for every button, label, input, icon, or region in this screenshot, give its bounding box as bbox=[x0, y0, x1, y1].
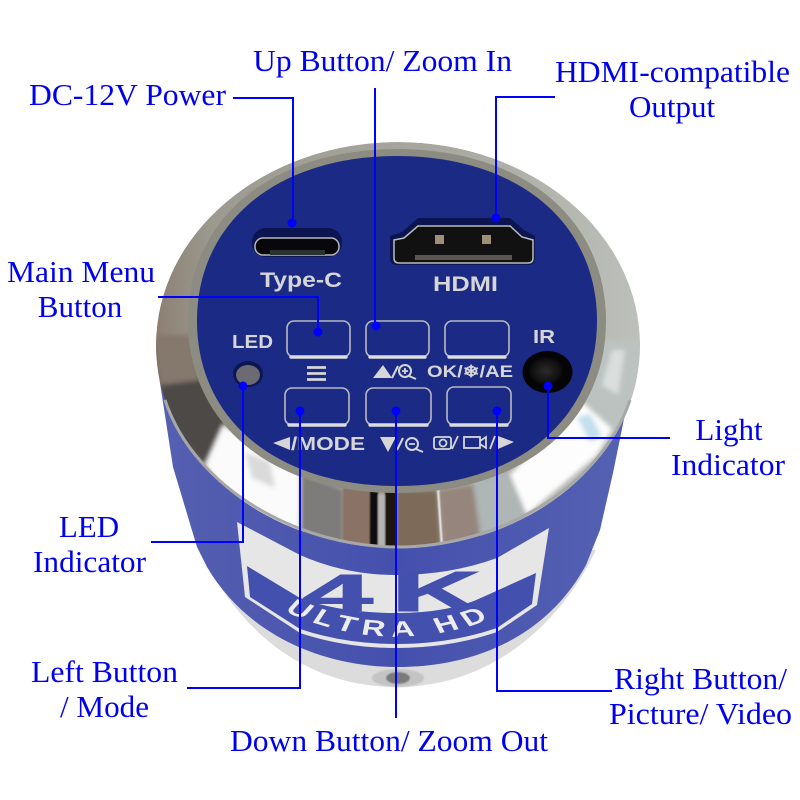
HDMI label: HDMI bbox=[433, 273, 498, 296]
label: hdmi output bbox=[555, 54, 790, 124]
Type-C port bbox=[252, 228, 342, 257]
label: down button: Down Button/ Zoom Out bbox=[230, 723, 548, 758]
line: left button bbox=[187, 406, 304, 688]
label: right button: Picture/ Video bbox=[609, 696, 792, 731]
4K logo: K bbox=[391, 560, 481, 624]
camera bbox=[156, 142, 640, 688]
down zoom legend bbox=[380, 437, 423, 452]
label: hdmi output: HDMI-compatible bbox=[555, 54, 790, 89]
bottom screw hole bbox=[372, 669, 424, 687]
LED label: LED bbox=[232, 332, 273, 352]
callout lines bbox=[151, 88, 670, 718]
label: led indicator: Indicator bbox=[33, 544, 147, 579]
mode legend bbox=[273, 433, 365, 454]
up button bbox=[366, 321, 429, 357]
label: right button: Right Button/ bbox=[614, 661, 787, 696]
Type-C label: Type-C bbox=[260, 269, 342, 292]
label: up button: Up Button/ Zoom In bbox=[253, 43, 513, 78]
mode legend: /MODE bbox=[291, 433, 365, 454]
4K logo: 4 bbox=[302, 565, 373, 623]
label: light indicator: Light bbox=[695, 412, 763, 447]
label: main menu bbox=[7, 254, 155, 324]
blue front panel bbox=[197, 156, 597, 486]
ok legend: OK/❄/AE bbox=[427, 363, 513, 381]
label: main menu: Button bbox=[38, 289, 123, 324]
label: left button bbox=[31, 654, 178, 724]
label: left button: / Mode bbox=[60, 689, 149, 724]
front panel bezel bbox=[188, 149, 606, 493]
HDMI port bbox=[390, 218, 535, 265]
4K label bbox=[237, 522, 549, 648]
label: hdmi output: Output bbox=[629, 89, 715, 124]
IR label: IR bbox=[533, 327, 555, 347]
ULTRA HD text: ULTRA HD bbox=[288, 599, 484, 637]
left button bbox=[285, 388, 349, 425]
label: main menu: Main Menu bbox=[7, 254, 155, 289]
label: right button bbox=[609, 661, 792, 731]
camera body silver base bbox=[200, 550, 596, 687]
camera body blue band bbox=[158, 370, 634, 667]
menu icon bbox=[307, 368, 326, 380]
LED lamp bbox=[233, 361, 263, 387]
ok button bbox=[445, 321, 509, 357]
white label plate bbox=[237, 522, 549, 648]
chrome top ring bbox=[150, 142, 645, 550]
IR sensor bbox=[522, 351, 572, 393]
line: power bbox=[233, 98, 296, 228]
down button bbox=[366, 388, 431, 425]
line: hdmi bbox=[492, 97, 555, 222]
label: power: DC-12V Power bbox=[29, 77, 227, 112]
menu button bbox=[287, 321, 350, 357]
line: light indicator bbox=[544, 382, 670, 438]
blue label panel bbox=[247, 566, 536, 644]
label: led indicator: LED bbox=[59, 509, 119, 544]
label: light indicator: Indicator bbox=[671, 447, 786, 482]
label: left button: Left Button bbox=[31, 654, 178, 689]
lower chrome edge bbox=[165, 400, 630, 547]
line: led bbox=[151, 382, 248, 542]
label: light indicator bbox=[671, 412, 786, 482]
line: down button bbox=[392, 406, 400, 718]
line: right button bbox=[492, 406, 612, 691]
photo video legend bbox=[434, 436, 514, 449]
4K logo bbox=[302, 560, 481, 624]
up zoom legend bbox=[373, 365, 416, 379]
right button bbox=[447, 387, 511, 425]
line: up button bbox=[372, 88, 380, 330]
label: led indicator bbox=[33, 509, 147, 579]
line: main menu bbox=[158, 297, 322, 336]
